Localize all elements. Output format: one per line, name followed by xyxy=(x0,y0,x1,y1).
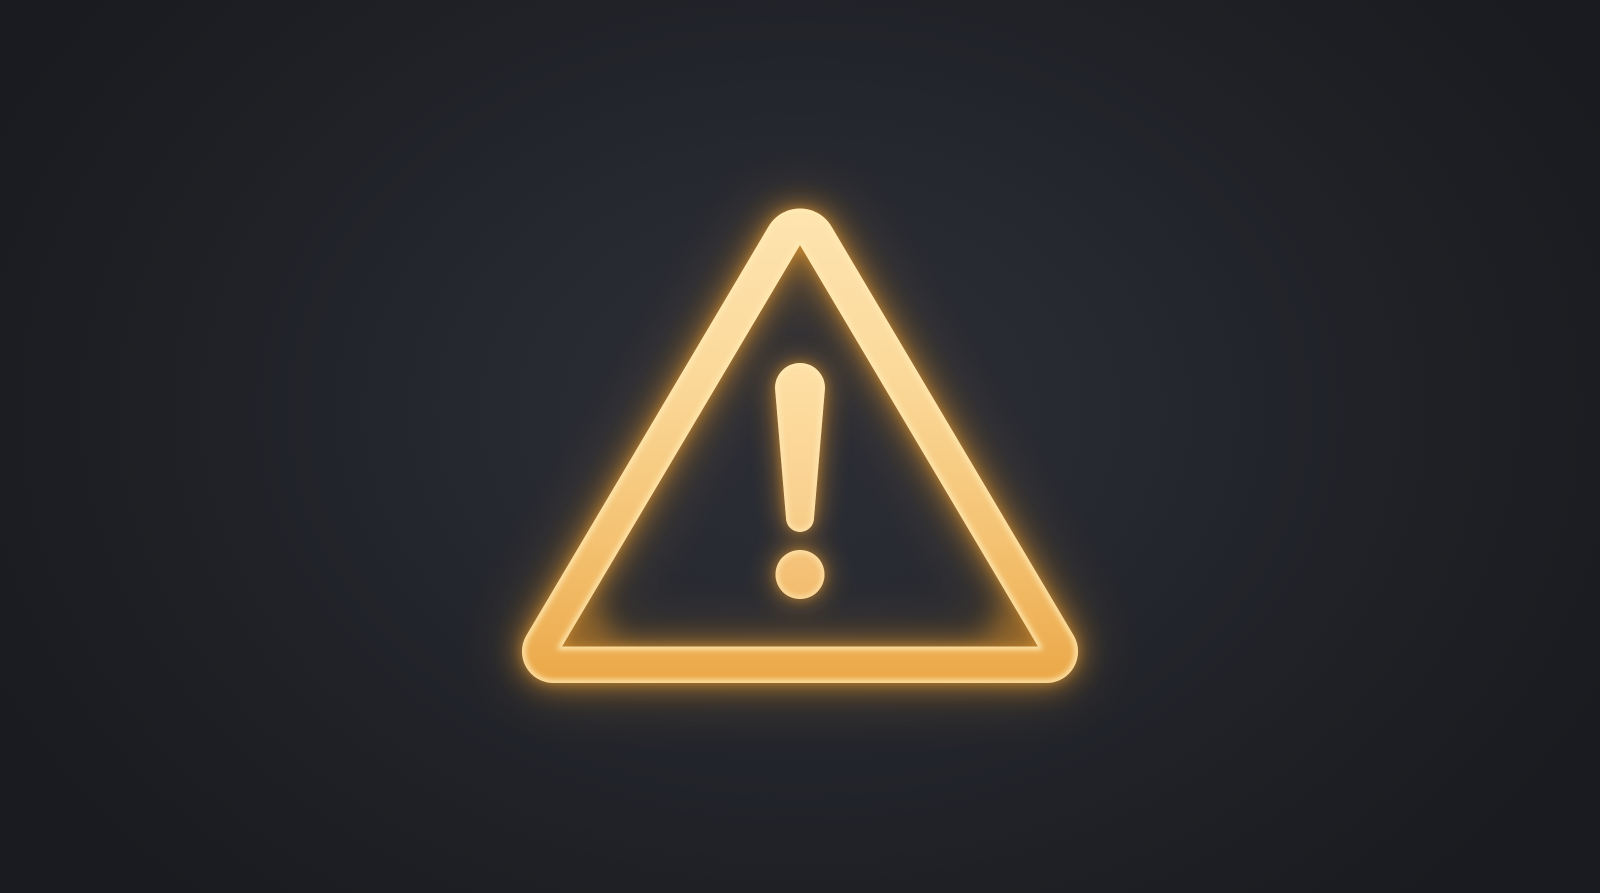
exclamation dot xyxy=(776,550,824,599)
exclamation mark xyxy=(775,363,825,599)
triangle outline xyxy=(522,209,1078,683)
glow: inner bottom corners xyxy=(562,600,1038,646)
glow: mid halo xyxy=(522,209,1078,683)
exclamation stem xyxy=(775,363,825,532)
glow: near halo xyxy=(522,209,1078,683)
glow: wide halo xyxy=(522,209,1078,683)
icon: glowing warning triangle xyxy=(494,180,1106,720)
